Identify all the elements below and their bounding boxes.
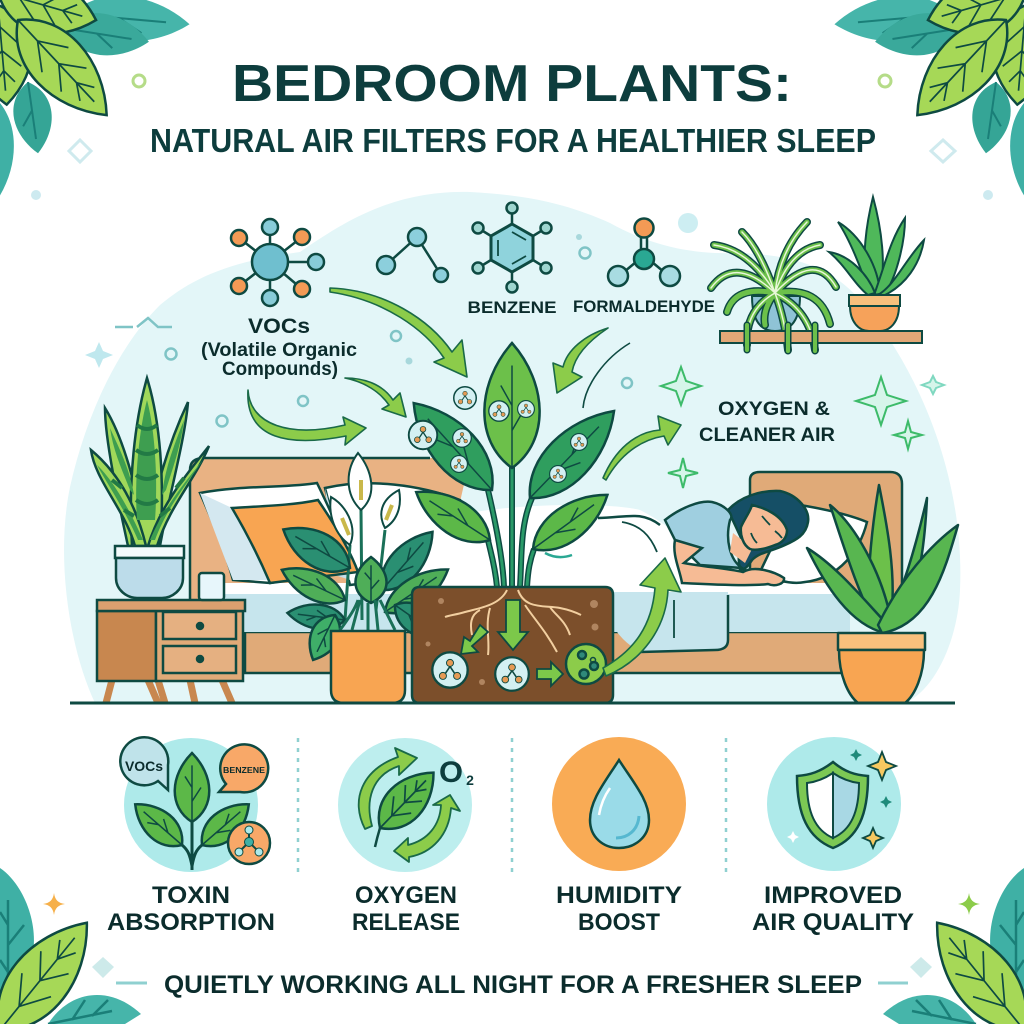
neck <box>730 533 752 563</box>
blue pot <box>752 296 800 331</box>
label: IMPROVED <box>764 882 902 909</box>
white pillow <box>200 483 350 583</box>
sparkles <box>661 367 944 488</box>
pot <box>838 633 925 650</box>
nightstand <box>97 573 245 703</box>
label: benzene: BENZENE <box>468 298 556 317</box>
bed <box>190 458 902 673</box>
orange pot <box>849 295 900 331</box>
absorbing cell <box>566 644 606 684</box>
bed frame <box>245 632 845 673</box>
toxin particles on leaves <box>409 387 587 482</box>
label: OXYGEN <box>355 882 457 909</box>
footer tagline: QUIETLY WORKING ALL NIGHT FOR A FRESHER SLEEP <box>164 971 862 999</box>
arm <box>674 540 784 585</box>
label: VOCs <box>201 315 357 380</box>
label: oxygen and cleaner air <box>699 399 835 446</box>
benefit: oxygen release <box>338 738 474 936</box>
torso <box>665 502 742 568</box>
pot <box>115 546 184 598</box>
spider plant <box>711 222 836 350</box>
label: BOOST <box>578 909 660 936</box>
icon: leaf with toxins: VOCs <box>125 758 163 774</box>
icon: leaf cycle: 2 <box>466 772 474 788</box>
benefit: toxin absorption <box>107 737 275 936</box>
icon: shield <box>767 737 901 871</box>
peace lily <box>275 453 456 703</box>
corner leaves: bottom left <box>0 868 141 1024</box>
label: VOCs: VOCs <box>248 315 310 338</box>
label <box>556 882 682 936</box>
right headboard <box>750 472 902 600</box>
blanket <box>420 505 728 652</box>
molecule: benzene <box>472 202 552 292</box>
label <box>752 882 914 936</box>
corner leaves: top left <box>0 0 192 201</box>
pot <box>331 631 405 703</box>
face <box>741 505 787 550</box>
molecule: VOCs <box>231 219 324 306</box>
snake plant <box>91 378 209 598</box>
aloe vera <box>807 485 958 703</box>
background blob <box>64 192 960 703</box>
label: ABSORPTION <box>107 909 275 936</box>
glass <box>199 573 224 600</box>
sleeping person <box>665 491 867 585</box>
green arrows <box>248 288 681 676</box>
label: TOXIN <box>152 882 230 909</box>
label: AIR QUALITY <box>752 909 914 936</box>
label: RELEASE <box>352 909 460 936</box>
title: BEDROOM PLANTS: <box>232 55 792 113</box>
label: VOCs: (Volatile Organic <box>201 340 357 361</box>
shelf <box>720 331 922 343</box>
benefit: humidity boost <box>552 737 686 936</box>
benefit: improved air quality <box>752 737 914 936</box>
label: VOCs: Compounds) <box>222 359 338 380</box>
molecule: chain <box>377 228 448 282</box>
label: oxygen and cleaner air: OXYGEN & <box>718 399 830 420</box>
label <box>352 882 460 936</box>
hanging leaves over shelf <box>747 325 815 351</box>
corner leaves: bottom right <box>883 868 1024 1024</box>
soil cross-section <box>412 587 613 703</box>
molecule: formaldehyde <box>608 218 680 286</box>
hair <box>728 491 808 570</box>
soil arrows <box>461 600 563 686</box>
roots <box>445 590 581 655</box>
bed pillow <box>760 505 867 583</box>
mattress <box>200 592 850 632</box>
label: formaldehyde: FORMALDEHYDE <box>573 297 715 316</box>
icon: water drop <box>552 737 686 871</box>
subtitle: NATURAL AIR FILTERS FOR A HEALTHIER SLEEP <box>150 122 876 159</box>
aloe on shelf <box>829 197 924 295</box>
label <box>107 882 275 936</box>
icon: leaf cycle <box>338 738 474 872</box>
central plant <box>397 343 630 587</box>
wall shelf with plants <box>711 197 924 351</box>
orange pillow <box>232 500 358 583</box>
label: oxygen and cleaner air: CLEANER AIR <box>699 425 835 446</box>
floor line <box>70 702 955 704</box>
icon: leaf with toxins <box>120 737 270 872</box>
back pillow <box>325 483 470 585</box>
flowers <box>330 453 400 620</box>
icon: leaf with toxins: BENZENE <box>223 765 265 775</box>
label: HUMIDITY <box>556 882 682 909</box>
icon: leaf cycle: O <box>439 756 463 789</box>
corner leaves: top right <box>832 0 1024 201</box>
dotted separators <box>298 738 726 878</box>
left headboard <box>190 458 470 600</box>
